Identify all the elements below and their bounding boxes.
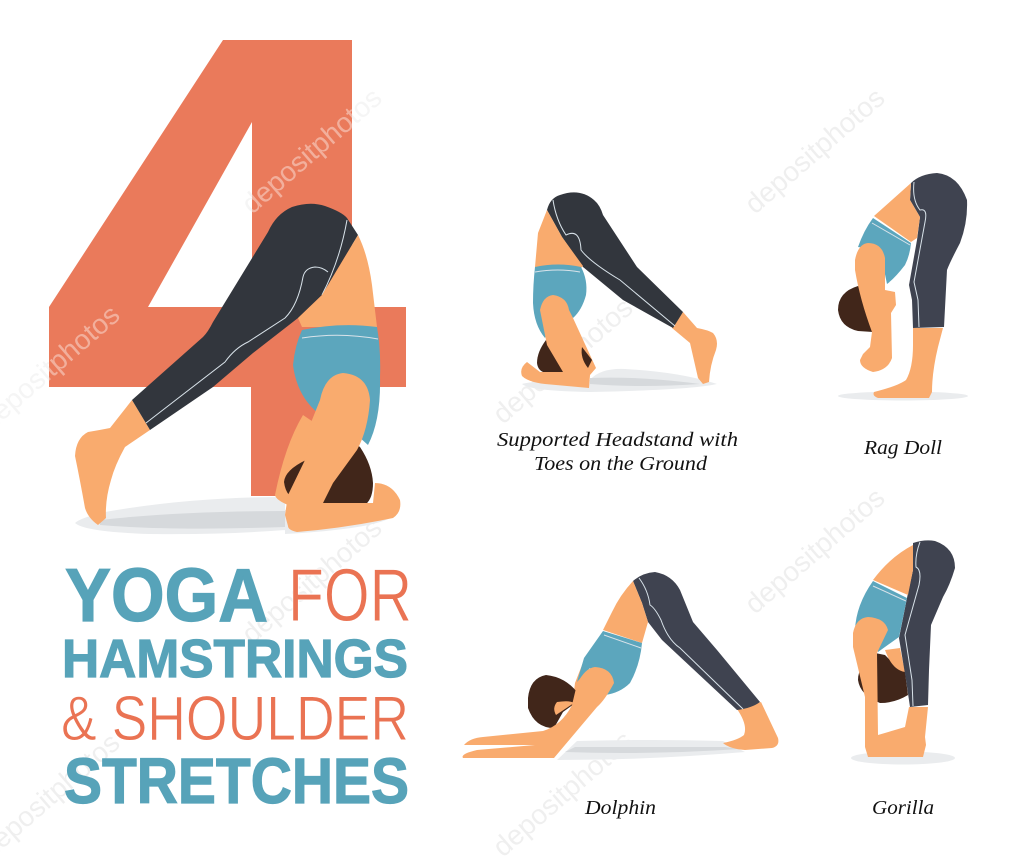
watermark text on number: depositphotos — [236, 82, 388, 220]
torso — [874, 183, 920, 242]
arm and hand — [521, 295, 596, 388]
floor shadow — [838, 392, 968, 400]
figure: supported headstand large — [75, 204, 400, 534]
lower leg and foot — [723, 702, 778, 750]
watermark text: depositphotos — [236, 512, 388, 650]
big number 4 — [49, 40, 406, 496]
arm and hand — [855, 243, 896, 372]
back arm — [573, 660, 590, 700]
watermark text: depositphotos — [487, 292, 639, 430]
leggings — [547, 192, 683, 328]
leggings — [899, 540, 955, 707]
arm and foot — [853, 617, 928, 757]
caption: Gorilla: Gorilla — [872, 797, 934, 819]
legging seam — [639, 578, 743, 709]
figure: rag doll — [838, 173, 968, 400]
top seam — [873, 586, 906, 601]
floor shadow — [557, 740, 745, 760]
top seam — [302, 335, 378, 339]
legging seam — [905, 542, 920, 706]
torso — [298, 235, 377, 327]
leggings — [633, 572, 760, 710]
leg and foot — [874, 328, 943, 398]
top seam — [535, 270, 580, 272]
floor shadow — [851, 752, 955, 764]
floor shadow — [522, 369, 717, 392]
torso — [535, 210, 583, 268]
teal top — [858, 218, 911, 284]
title line SHOULDER: & SHOULDER — [61, 684, 409, 754]
hair — [838, 286, 873, 332]
figure: gorilla — [851, 540, 955, 764]
leggings — [132, 204, 358, 430]
leggings — [909, 173, 967, 328]
hair — [537, 340, 565, 373]
watermark text on number — [0, 82, 388, 437]
caption: Rag Doll: Rag Doll — [863, 437, 942, 459]
hair — [858, 653, 908, 703]
caption: Supported Headstand — [497, 429, 738, 475]
floor shadow — [75, 497, 398, 534]
watermark text: depositphotos — [487, 725, 639, 861]
torso — [603, 581, 648, 643]
lower leg and foot — [672, 312, 717, 384]
hair back — [284, 460, 306, 495]
figure: dolphin — [463, 572, 778, 760]
face — [554, 701, 574, 715]
top seam — [604, 635, 641, 648]
hair — [320, 440, 373, 504]
back arm — [275, 415, 325, 505]
arms and hands — [463, 667, 614, 758]
face — [885, 648, 905, 672]
title line STRETCHES: STRETCHES — [64, 745, 409, 817]
title — [61, 553, 412, 817]
teal top — [855, 581, 907, 652]
title line HAMSTRINGS: HAMSTRINGS — [62, 629, 408, 689]
small hair — [582, 347, 592, 368]
torso — [873, 545, 913, 595]
teal top — [533, 264, 586, 338]
teal top — [577, 631, 642, 695]
front arm and hand — [285, 373, 400, 532]
legging seam — [914, 182, 926, 327]
caption: Supported Headstand: Toes on the Ground — [534, 453, 708, 475]
legging seam — [146, 220, 347, 423]
figure: supported headstand small — [521, 192, 717, 392]
title line YOGA: YOGA — [65, 553, 268, 637]
watermark text — [0, 82, 891, 861]
legging seam — [553, 200, 675, 326]
watermark text: depositphotos — [739, 482, 891, 620]
caption: Dolphin: Dolphin — [584, 797, 656, 819]
top seam — [872, 223, 910, 245]
caption: Supported Headstand: Supported Headstand with — [497, 429, 738, 451]
title word FOR: FOR — [288, 553, 412, 637]
lower leg and foot — [75, 400, 150, 525]
watermark text: depositphotos — [236, 82, 388, 220]
watermark text: depositphotos — [739, 82, 891, 220]
teal top — [293, 325, 380, 445]
hair — [528, 675, 577, 728]
